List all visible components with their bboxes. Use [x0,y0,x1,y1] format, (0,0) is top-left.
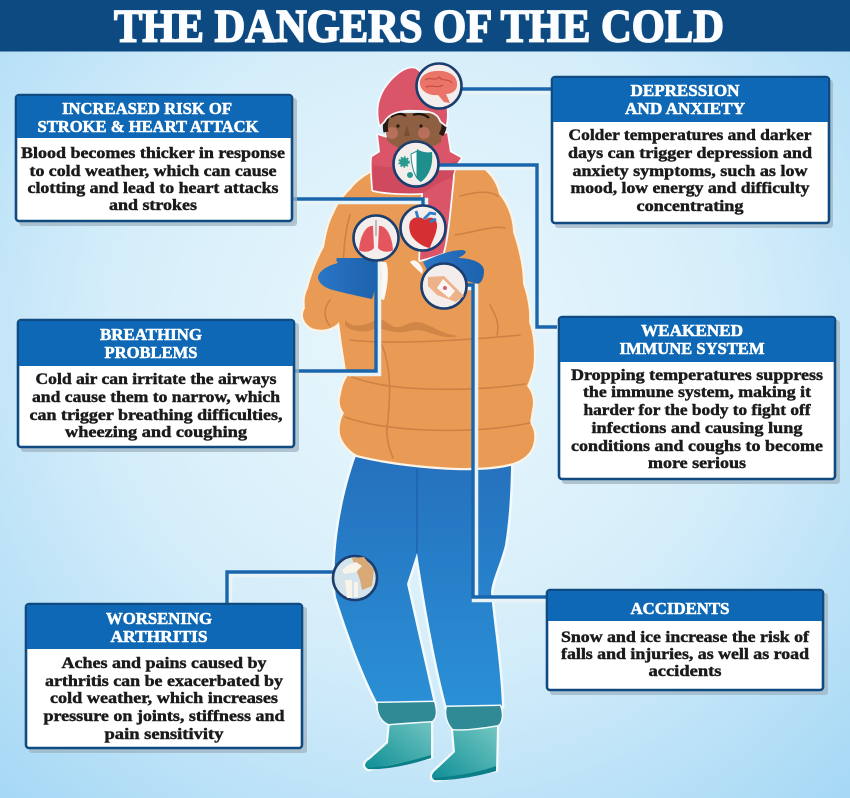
boot: left [365,702,436,769]
panel header: DEPRESSION [630,81,740,100]
panel header [17,96,291,138]
panel: depression and anxiety [552,77,833,228]
panel body text: Colder temperatures and darker [568,127,812,144]
panel header [27,605,301,649]
panel header: INCREASED RISK OF [62,99,232,118]
panel body text: the immune system, making it [583,384,812,401]
panel header: AND ANXIETY [625,99,745,118]
panel header: STROKE & HEART ATTACK [38,117,259,136]
panel body text: days can trigger depression and [568,145,812,162]
panel body text: falls and injuries, as well as road [561,646,809,663]
panel header: PROBLEMS [104,343,198,362]
panel body text [44,655,285,743]
panel: stroke and heart attack [16,95,297,226]
panel body text: Blood becomes thicker in response [21,145,285,162]
panel body text [30,371,283,441]
panel header: BREATHING [100,325,202,344]
panel header: WEAKENED [641,321,743,340]
panel body text [21,145,285,214]
trousers [320,0,511,708]
panel header [548,591,822,621]
person figure [303,0,534,780]
panel body text [571,367,823,472]
panel body text: mood, low energy and difficulty [570,180,810,197]
icon: immune shield [394,142,438,186]
panel header [553,78,828,122]
icon: knee [333,556,377,600]
panel body text: Aches and pains caused by [62,655,267,672]
connector lines [227,89,557,603]
panel body text: to cold weather, which can cause [30,163,277,180]
panel: worsening arthritis [26,604,307,753]
panel body text: wheezing and coughing [65,424,247,441]
panel: accidents [547,590,828,695]
panel header: IMMUNE SYSTEM [620,339,765,358]
mittens [318,250,484,300]
panel header [560,318,834,362]
panel body text: anxiety symptoms, such as low [572,163,808,180]
panel header: ARTHRITIS [110,627,208,646]
panel body text: can trigger breathing difficulties, [30,407,283,424]
panel body text: more serious [648,455,746,472]
panel body text: pressure on joints, stiffness and [44,708,285,725]
icon: hand [422,264,466,308]
panel body text: cold weather, which increases [50,690,278,707]
panel body text: harder for the body to fight off [584,402,811,419]
head and hat [378,68,447,150]
panel body text: accidents [648,663,722,680]
panel header: ACCIDENTS [630,599,730,618]
panel body text [568,127,812,215]
panel body text [561,629,810,680]
panel body text: infections and causing lung [592,420,803,437]
panel: weakened immune system [559,317,840,484]
panel body text: Dropping temperatures suppress [571,367,823,384]
panel body text: and strokes [109,197,197,214]
panel header: WORSENING [106,609,212,628]
icon: lungs [354,216,398,260]
scarf [372,133,461,260]
boot: right [432,706,502,780]
panel body text: clotting and lead to heart attacks [28,180,278,197]
panel header [19,321,293,366]
icon: heart [400,206,446,250]
panel: breathing problems [18,320,299,452]
puffer jacket [303,167,534,468]
panel body text: Cold air can irritate the airways [36,371,276,388]
panel body text: arthritis can be exacerbated by [45,673,283,690]
panel body text: concentrating [636,198,744,215]
title banner: THE DANGERS OF THE COLD [114,0,724,52]
panel body text: pain sensitivity [104,726,224,743]
panel body text: and cause them to narrow, which [32,389,280,406]
icon: brain [416,64,462,108]
panel body text: Snow and ice increase the risk of [561,629,810,646]
panel body text: conditions and coughs to become [571,438,823,455]
